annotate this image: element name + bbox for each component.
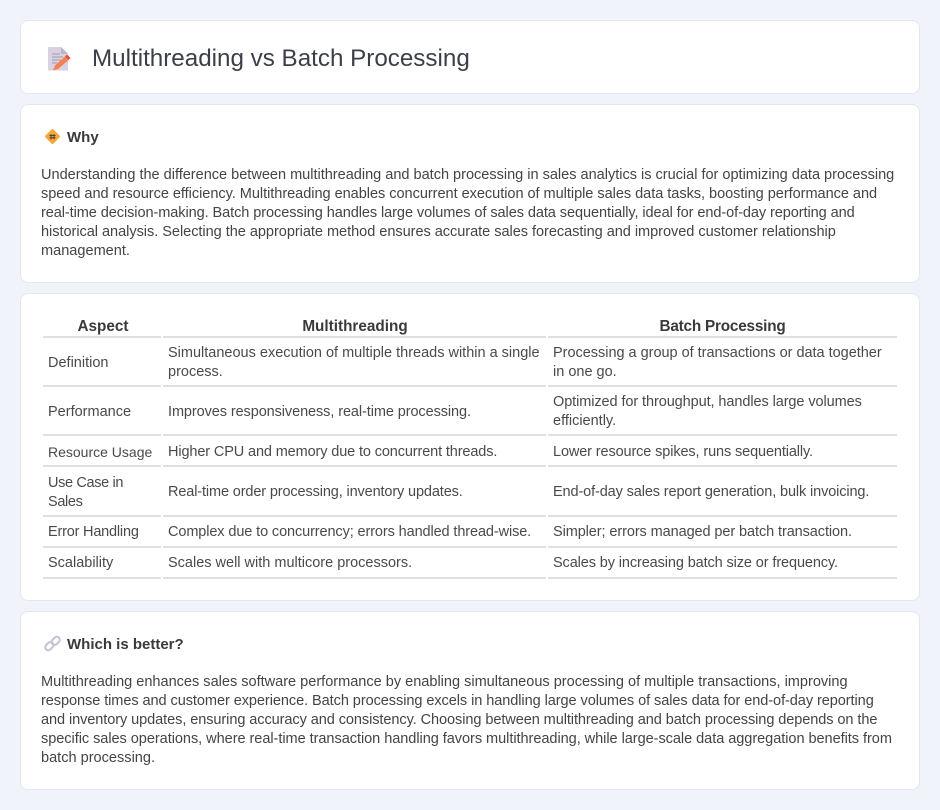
title: Multithreading vs Batch Processing — [92, 45, 470, 72]
panel: comparison table — [20, 293, 920, 601]
panel: which is better — [20, 611, 920, 790]
row: definition: Simultaneous execution of multiple threads within a single — [168, 345, 540, 361]
panel: header — [20, 20, 920, 94]
row: scalability — [48, 555, 838, 571]
text block: why: Understanding the difference between multithreading and batch processing in sales analytics is crucial for optimizing data processing — [41, 167, 894, 183]
heading: why: Why — [67, 129, 99, 146]
row: performance — [48, 394, 862, 429]
row: use case in sales: Real-time order processing, inventory updates. — [168, 484, 463, 500]
row: scalability: Scales well with multicore processors. — [168, 555, 412, 571]
text block: which is better: specific sales operations, where real-time transaction handling favors multithreading, while large-scale data aggregation benefits from — [41, 731, 892, 747]
heading: which is better: Which is better? — [67, 636, 184, 653]
row: error handling: Simpler; errors managed per batch transaction. — [553, 524, 852, 540]
row: use case in sales — [48, 475, 869, 510]
text block: which is better: Multithreading enhances sales software performance by enabling simultaneous processing of multiple transactions, improving — [41, 674, 848, 690]
row: performance: efficiently. — [553, 413, 616, 429]
table header: aspect: Aspect — [77, 318, 128, 335]
row: performance: Optimized for throughput, handles large volumes — [553, 394, 862, 410]
text block: why: real-time decision-making. Batch processing handles large volumes of sales data sequentially, ideal for end-of-day reporting and — [41, 205, 855, 221]
icon: document with pencil — [48, 47, 70, 70]
panel: why — [20, 104, 920, 283]
text block: why: speed and resource efficiency. Multithreading enables concurrent execution of multiple sales data tasks, boosting performance and — [41, 186, 877, 202]
row: use case in sales: Sales — [48, 494, 83, 510]
row: use case in sales: End-of-day sales report generation, bulk invoicing. — [553, 484, 869, 500]
row: error handling: Complex due to concurrency; errors handled thread-wise. — [168, 524, 531, 540]
text block: which is better — [41, 674, 892, 766]
text block: why: historical analysis. Selecting the appropriate method ensures accurate sales forecasting and improved customer relationship — [41, 224, 836, 240]
text block: which is better: batch processing. — [41, 750, 155, 766]
row: definition: Processing a group of transactions or data together — [553, 345, 882, 361]
table header: batch processing: Batch Processing — [659, 318, 786, 335]
row: definition: in one go. — [553, 364, 617, 380]
text block: which is better: and inventory updates, ensuring accuracy and consistency. Choosing between multithreading and batch processing depends on the — [41, 712, 877, 728]
text block: why — [41, 167, 894, 259]
row: definition — [48, 345, 882, 380]
icon: chain link — [44, 636, 61, 652]
row: error handling — [48, 524, 852, 540]
row: use case in sales: Use Case in — [48, 475, 123, 491]
row: definition: Definition — [48, 355, 108, 371]
table header: multithreading: Multithreading — [302, 318, 408, 335]
text block: which is better: response times and customer experience. Batch processing excels in handling large volumes of sales data for end-of-day reporting — [41, 693, 874, 709]
row: scalability: Scalability — [48, 555, 113, 571]
row: definition: process. — [168, 364, 223, 380]
row: error handling: Error Handling — [48, 524, 139, 540]
row: performance: Performance — [48, 404, 131, 420]
text block: why: management. — [41, 243, 130, 259]
row: scalability: Scales by increasing batch size or frequency. — [553, 555, 838, 571]
icon: warning diamond — [45, 129, 60, 144]
row: resource usage: Resource Usage — [48, 444, 152, 460]
row: resource usage: Lower resource spikes, runs sequentially. — [553, 444, 813, 460]
row: resource usage — [48, 444, 813, 460]
row: performance: Improves responsiveness, real-time processing. — [168, 404, 471, 420]
row: resource usage: Higher CPU and memory due to concurrent threads. — [168, 444, 497, 460]
